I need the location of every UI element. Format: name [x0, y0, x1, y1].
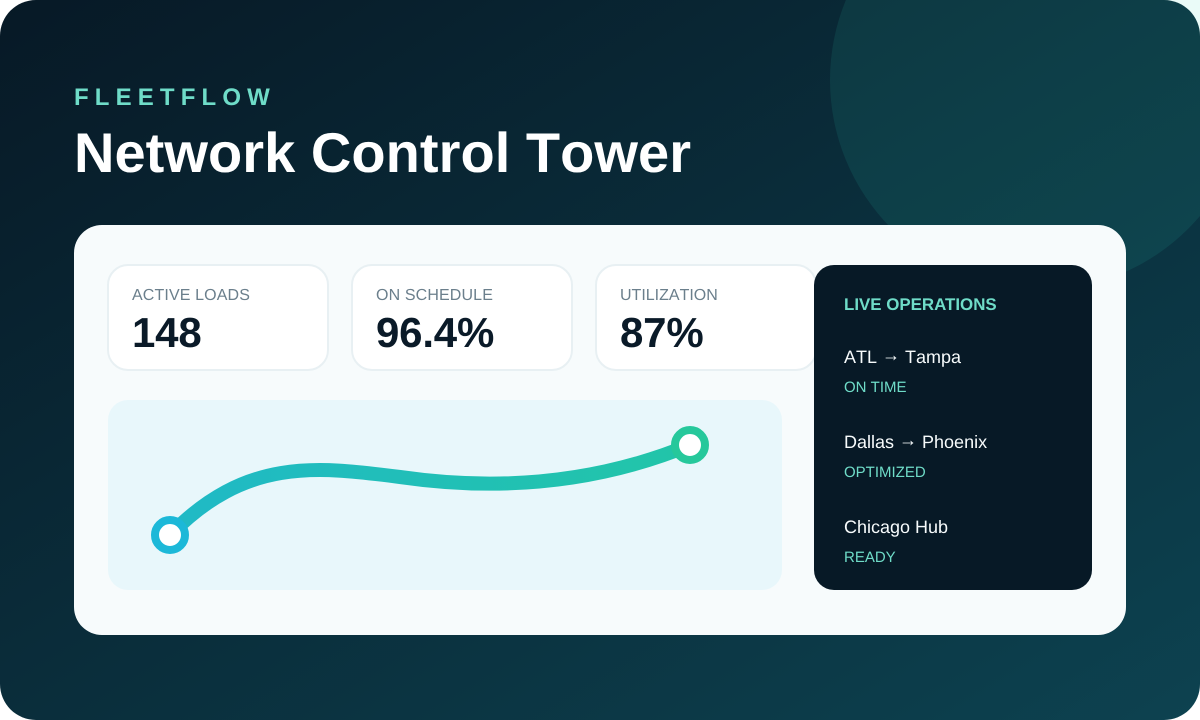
route chart — [108, 400, 782, 590]
item: ATL to Tampa: ON TIME — [844, 379, 906, 396]
item: Chicago Hub: Chicago Hub — [844, 517, 948, 537]
panel heading: LIVE OPERATIONS — [844, 295, 997, 314]
decorative circle — [830, 0, 1200, 290]
title: Network Control Tower — [74, 121, 691, 184]
stat card: utilization — [595, 264, 817, 371]
destination marker — [675, 430, 705, 460]
item: Dallas to Phoenix: OPTIMIZED — [844, 464, 926, 481]
stat card: utilization: UTILIZATION — [620, 287, 718, 304]
stat card: on schedule: 96.4% — [376, 309, 494, 356]
route line — [170, 445, 690, 535]
origin marker — [155, 520, 185, 550]
item: Chicago Hub — [844, 517, 948, 566]
item: ATL to Tampa — [844, 345, 961, 396]
stat card: active loads: 148 — [132, 309, 201, 356]
item: Chicago Hub: READY — [844, 549, 896, 566]
stat card: active loads — [107, 264, 329, 371]
item: ATL to Tampa: ATL → Tampa — [844, 345, 961, 367]
item: Dallas to Phoenix: Dallas → Phoenix — [844, 430, 987, 452]
stat card: utilization: 87% — [620, 309, 703, 356]
item: Dallas to Phoenix — [844, 430, 987, 481]
stat card: active loads: ACTIVE LOADS — [132, 287, 250, 304]
stat card: on schedule: ON SCHEDULE — [376, 287, 493, 304]
stat card: on schedule — [351, 264, 573, 371]
live operations panel — [814, 265, 1092, 590]
main card — [74, 225, 1126, 635]
brand eyebrow: FLEETFLOW — [74, 84, 276, 111]
